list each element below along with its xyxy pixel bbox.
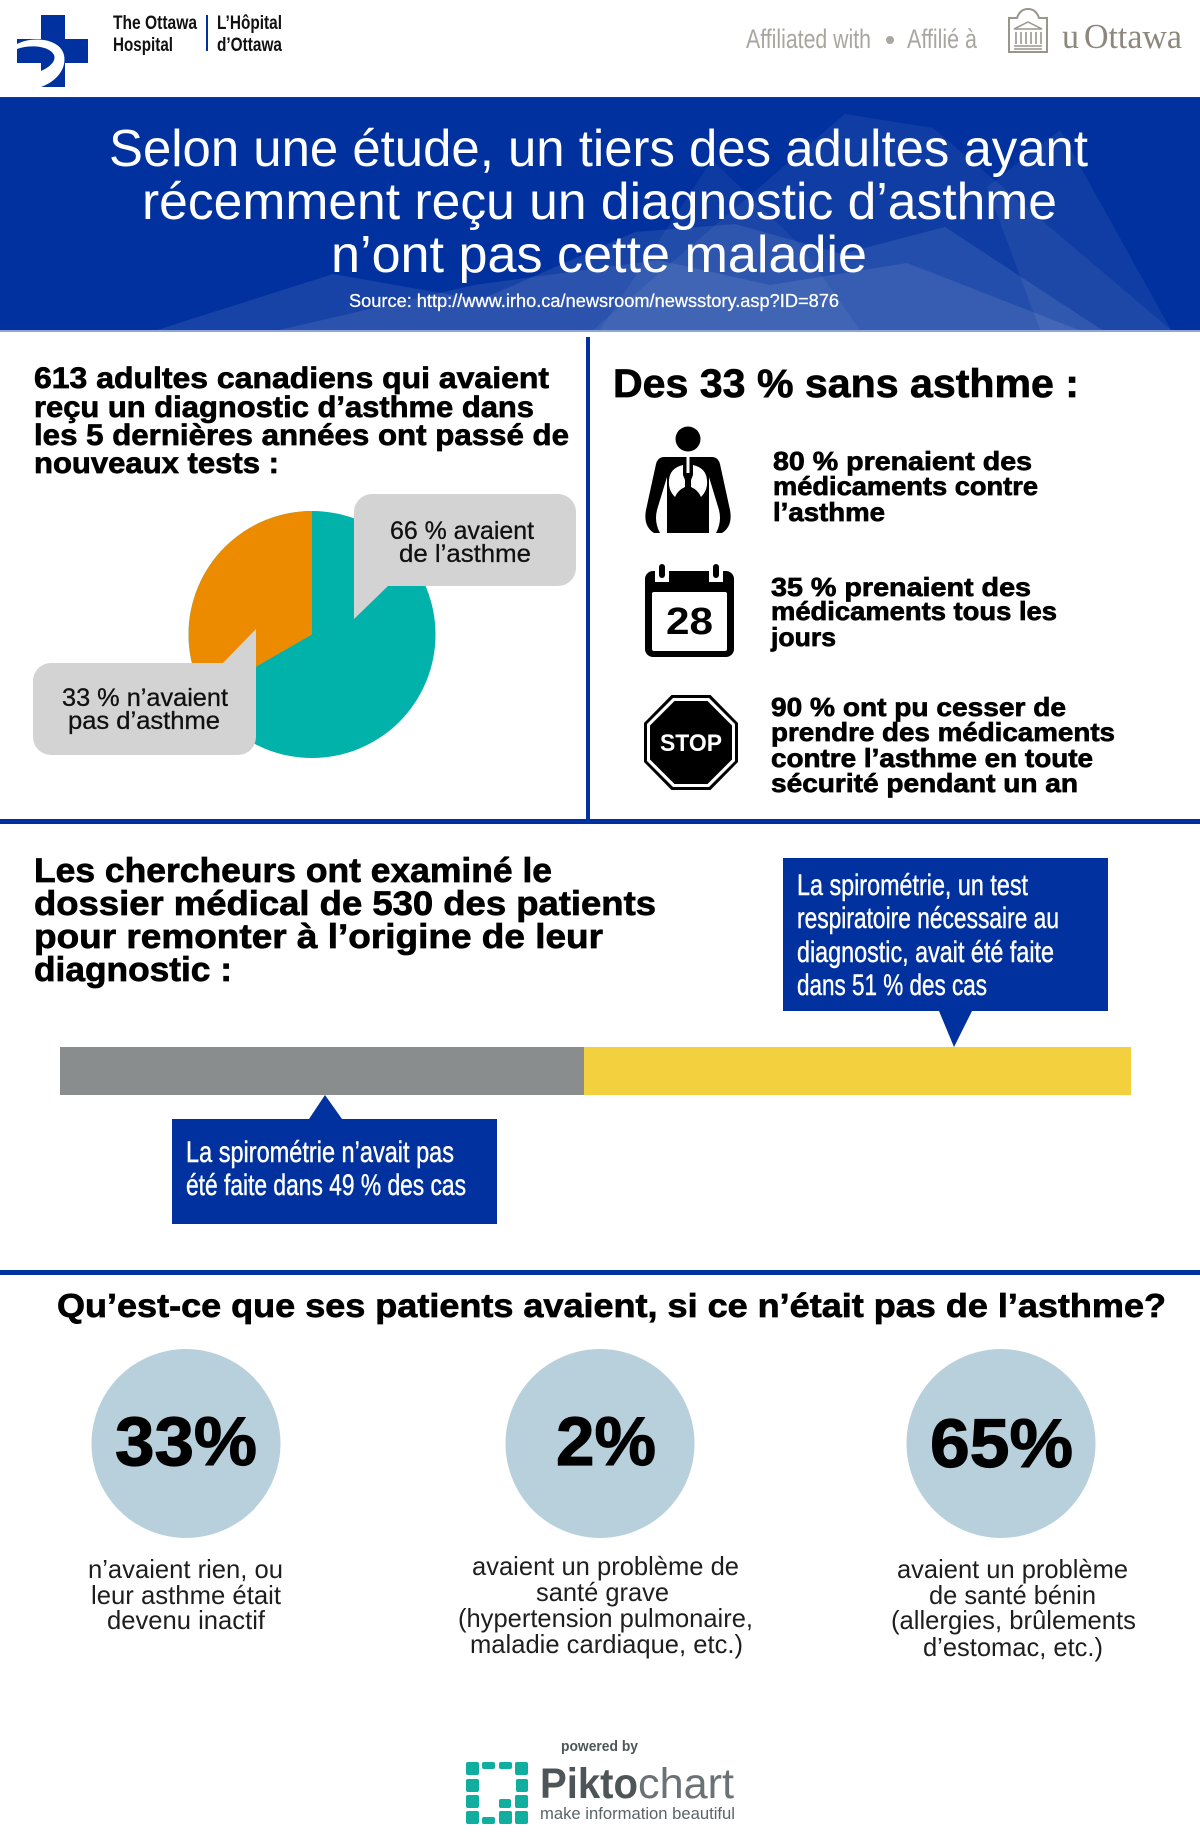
callout: 51%: dans 51 % des cas [797,969,987,1002]
heading: chercheurs [34,852,656,989]
caption: 2% [458,1551,753,1659]
footer: piktochart logo: chart [638,1760,734,1808]
header: hospital logo [17,13,282,87]
callout: 51%: respiratoire nécessaire au [797,902,1059,935]
title text: Selon une étude, un tiers des adultes ayant [109,120,1089,178]
callout: 49% [172,1095,497,1224]
icon: calendar [645,562,734,657]
stat circle: 33% [92,1349,280,1538]
callout: 33%: 33 % n’avaient [62,684,228,712]
stat: 80% [773,446,1038,527]
heading: chercheurs: pour remonter à l’origine de leur [34,918,603,956]
icon: hospital cross [17,15,88,87]
stat circle: 65%: 65% [930,1405,1073,1482]
caption: 65%: (allergies, brûlements [891,1605,1136,1635]
icon: body with lungs [645,426,731,533]
caption: 65%: avaient un problème [897,1554,1128,1584]
caption: 33%: leur asthme était [91,1580,282,1610]
icon: stop sign: STOP [660,730,722,757]
icon: university building [1009,9,1047,52]
heading: question: Qu’est-ce que ses patients avaient, si ce n’était pas de l’asthme? [57,1287,1166,1324]
panel: spirometry records [34,852,1131,1224]
callout: 51%: La spirométrie, un test [797,869,1029,902]
stat: 35% [770,572,1057,652]
caption: 33%: devenu inactif [107,1605,266,1635]
stat: 35%: 35 % prenaient des [771,572,1031,602]
footer: piktochart logo [466,1738,735,1824]
stat circle: 65% [906,1349,1096,1538]
stat: 35%: jours [770,622,836,652]
title text: récemment reçu un diagnostic d’asthme [142,173,1057,231]
caption: 33%: n’avaient rien, ou [88,1554,283,1584]
stat: 35%: médicaments tous les [771,596,1057,626]
footer: piktochart logo: powered by [561,1738,639,1755]
heading: 613 adults: 613 adultes canadiens qui avaient [34,362,549,395]
callout: 51%: diagnostic, avait été faite [797,936,1054,969]
stat circle: 2% [506,1349,694,1538]
callout: 33% [33,629,256,755]
hospital name: L’Hôpital [217,13,282,34]
title banner [0,97,1200,332]
stat: 80%: médicaments contre [773,471,1038,501]
header: university affiliation: Affilié à [907,24,978,54]
callout: 49%: La spirométrie n’avait pas [186,1136,454,1169]
heading: chercheurs: diagnostic : [34,951,232,989]
heading: 613 adults: les 5 dernières années ont passé de [34,419,569,452]
stat: 80%: l’asthme [773,497,885,527]
stat: 80%: 80 % prenaient des [773,446,1032,476]
panel: other conditions [57,1287,1166,1662]
title text [109,120,1089,284]
callout: 33%: pas d’asthme [68,707,220,735]
caption: 2%: avaient un problème de [472,1551,739,1581]
panel: the 33% without asthma [613,362,1115,798]
icon: stop sign [644,695,738,790]
university name: u [1062,17,1079,56]
stat circle: 33%: 33% [115,1403,257,1480]
panel: new tests [33,362,576,758]
hospital name [113,13,282,56]
footer: piktochart logo: make information beautiful [540,1804,735,1823]
heading: 613 adults: reçu un diagnostic d’asthme dans [34,391,534,424]
callout: 66% [354,494,576,619]
callout: 51% [783,858,1108,1047]
heading: chercheurs: Les chercheurs ont examiné le [34,852,552,890]
caption: 65% [891,1554,1136,1662]
hospital name: Hospital [113,35,173,56]
pie chart [188,511,436,758]
heading: chercheurs: dossier médical de 530 des patients [34,885,656,923]
source line: Source: http://www.irho.ca/newsroom/newsstory.asp?ID=876 [349,291,839,311]
header: university affiliation [746,9,1182,56]
stat: 90%: 90 % ont pu cesser de [771,692,1066,722]
vertical divider [586,337,590,819]
caption: 2%: santé grave [536,1577,669,1607]
stacked bar [60,1047,1131,1095]
caption: 65%: d’estomac, etc.) [923,1632,1103,1662]
stat: 90%: contre l’asthme en toute [771,743,1093,773]
caption: 2%: maladie cardiaque, etc.) [470,1629,743,1659]
callout: 66%: 66 % avaient [390,517,534,545]
caption: 65%: de santé bénin [929,1580,1096,1610]
title text: n’ont pas cette maladie [331,226,867,284]
heading: 613 adults [34,362,569,480]
caption: 2%: (hypertension pulmonaire, [458,1603,753,1633]
header: university affiliation: Affiliated with [746,24,871,54]
hospital name: d’Ottawa [217,35,282,56]
callout: 49%: été faite dans 49 % des cas [186,1169,466,1202]
stat: 90%: prendre des médicaments [771,717,1115,747]
stat: 90% [771,692,1115,798]
stat circle: 2%: 2% [556,1403,656,1480]
university name: Ottawa [1084,17,1182,56]
heading: 613 adults: nouveaux tests : [34,447,279,480]
stat: 90%: sécurité pendant un an [771,768,1078,798]
callout: 66%: de l’asthme [399,540,531,568]
caption: 33% [88,1554,283,1635]
heading: des 33 %: Des 33 % sans asthme : [613,362,1079,406]
icon: calendar: 28 [666,601,713,643]
icon: piktochart grid [466,1762,528,1824]
footer: piktochart logo: Pikto [540,1760,638,1808]
hospital name: The Ottawa [113,13,197,34]
